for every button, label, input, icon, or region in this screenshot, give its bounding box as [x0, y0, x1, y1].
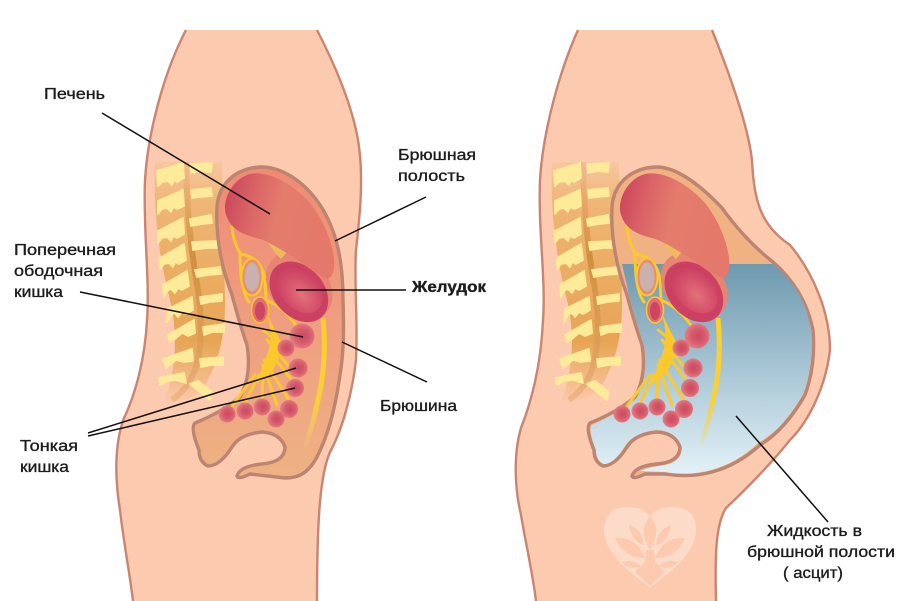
- abdominal cavity: left figure: [193, 167, 344, 478]
- label: ascites fluid: [747, 523, 895, 582]
- label: small intestine: Тонкая: [20, 438, 78, 455]
- label: transverse colon: кишка: [14, 284, 63, 301]
- label: liver: Печень: [44, 86, 105, 103]
- abdominal cavity with fluid: right figure: [588, 167, 814, 478]
- label: stomach: Желудок: [411, 279, 486, 296]
- label: transverse colon: ободочная: [14, 263, 103, 280]
- body: left figure: [116, 30, 361, 601]
- label: abdominal cavity: Брюшная: [398, 147, 476, 164]
- organs: left figure: [218, 173, 346, 447]
- leader lines: [80, 113, 828, 522]
- label: transverse colon: [14, 242, 116, 301]
- label: small intestine: кишка: [20, 459, 69, 476]
- label: transverse colon: Поперечная: [14, 242, 116, 259]
- label: abdominal cavity: полость: [398, 168, 465, 185]
- fluid: [591, 264, 812, 474]
- label: ascites fluid: Жидкость в: [767, 523, 862, 540]
- label: abdominal cavity: [398, 147, 476, 185]
- body: right figure: [516, 30, 830, 601]
- label: ascites fluid: ( асцит): [783, 565, 843, 582]
- spine: right figure: [552, 162, 622, 401]
- label: peritoneum: Брюшина: [380, 398, 457, 415]
- label: ascites fluid: брюшной полости: [747, 544, 895, 561]
- watermark logo: [604, 507, 696, 587]
- organs: right figure: [614, 173, 741, 447]
- label: small intestine: [20, 438, 78, 476]
- spine: left figure: [155, 162, 225, 401]
